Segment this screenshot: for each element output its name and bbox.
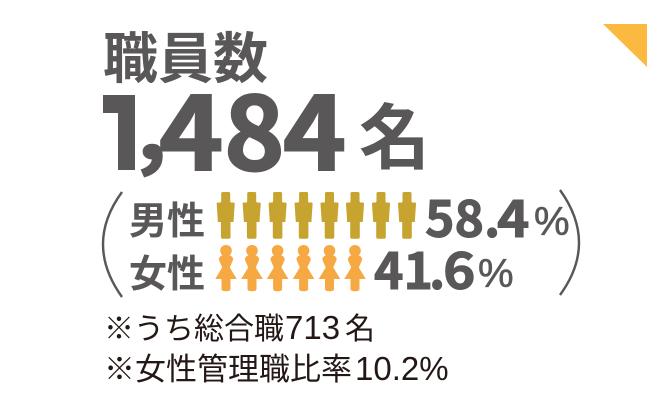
- male percentage: 58: [425, 180, 484, 252]
- female pictogram row: [215, 245, 366, 291]
- note: 総合職: 名: [345, 313, 375, 346]
- total staff number: 1: [91, 54, 151, 200]
- male percentage: .: [484, 180, 500, 252]
- female percentage: 41: [374, 232, 433, 304]
- left bracket: [103, 192, 122, 297]
- label: 男性: 男性: [129, 201, 205, 243]
- label: 女性: 女性: [129, 254, 205, 296]
- male pictogram row: [217, 192, 416, 239]
- female percentage: %: [478, 252, 514, 296]
- female percentage: .: [429, 232, 445, 304]
- total staff number: [103, 93, 344, 178]
- male percentage: [425, 180, 570, 252]
- note: 女性管理職比率: ※女性管理職比率: [104, 352, 352, 387]
- right bracket: [560, 190, 579, 295]
- male percentage: %: [534, 200, 570, 244]
- corner triangle: [603, 24, 647, 67]
- unit: 名: 名: [359, 100, 430, 179]
- heading: 職員数: 職員数: [103, 28, 268, 90]
- note: 総合職: ※うち総合職: [104, 313, 284, 346]
- note: 女性管理職比率: 10.2%: [355, 350, 449, 387]
- female percentage: [374, 232, 514, 304]
- note: 総合職: 713: [285, 309, 340, 346]
- total staff number: 4: [283, 53, 346, 199]
- total staff number: 8: [224, 54, 285, 200]
- female percentage: 6: [443, 232, 475, 304]
- male percentage: 4: [497, 180, 529, 252]
- total staff number: 4: [159, 54, 223, 200]
- total staff number: ,: [137, 65, 167, 182]
